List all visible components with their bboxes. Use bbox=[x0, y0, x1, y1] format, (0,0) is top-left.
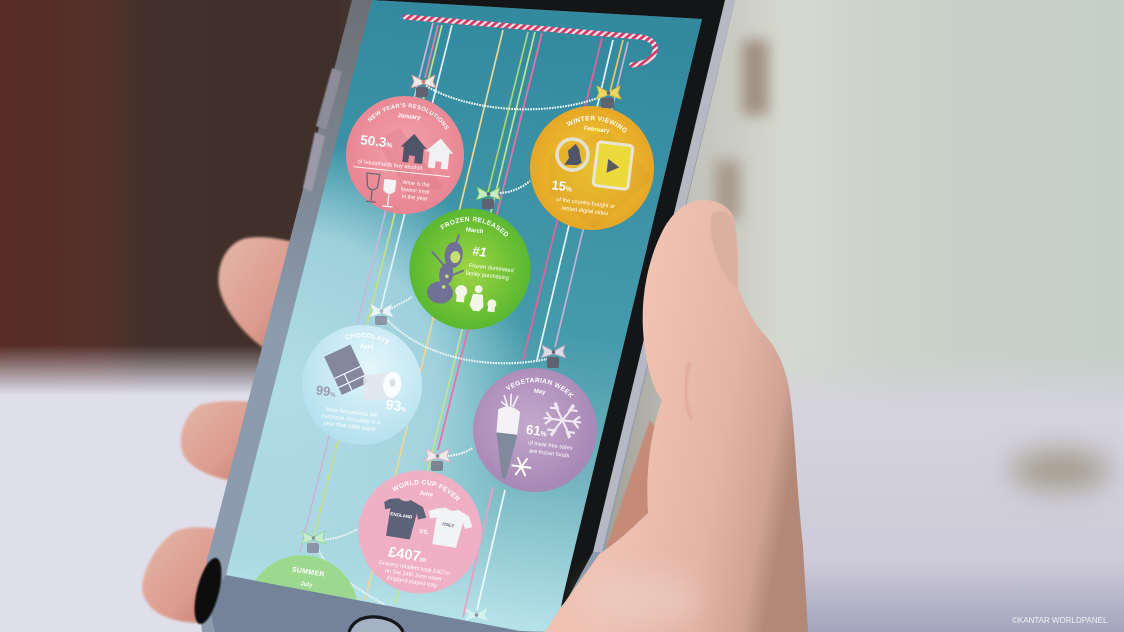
palm highlight bbox=[580, 570, 700, 626]
thumb shape bbox=[545, 200, 808, 632]
carrot icon bbox=[496, 394, 520, 479]
screen background bbox=[200, 0, 720, 632]
phone screen bbox=[226, 0, 702, 632]
bauble: Winter Viewing bbox=[530, 106, 654, 230]
bow: Winter Viewing bbox=[596, 86, 621, 108]
bauble: Winter Viewing: 15% bbox=[551, 177, 574, 195]
home button bbox=[349, 617, 403, 632]
bauble: Frozen Released: #1 bbox=[471, 243, 488, 260]
bauble: Winter Viewing: rented digital video bbox=[561, 206, 608, 217]
bauble: Chocolate: CHOCOLATE bbox=[345, 332, 390, 345]
bow: next bauble bbox=[465, 608, 488, 621]
dark wine glass bbox=[364, 173, 380, 202]
bauble: Frozen Released: family purchasing bbox=[465, 271, 509, 282]
finger one bbox=[218, 237, 300, 350]
white wine glass bbox=[382, 179, 396, 207]
silver right edge bbox=[592, 0, 735, 552]
bauble: Vegetarian Week: VEGETARIAN WEEK bbox=[505, 378, 574, 398]
bauble: World Cup Fever: Grocery retailers took £407m bbox=[378, 560, 451, 577]
copyright: ©KANTAR WORLDPANEL bbox=[1012, 616, 1108, 625]
bauble: Summer, July bbox=[255, 555, 357, 600]
bow: Chocolate bbox=[370, 304, 393, 325]
bauble: World Cup Fever: VS. bbox=[419, 529, 430, 536]
finger two bbox=[181, 401, 262, 481]
chocolate bar icon bbox=[324, 345, 368, 395]
phone body bbox=[200, 0, 735, 632]
bead garlands bbox=[318, 86, 606, 618]
bauble: Frozen Released: Frozen dominated bbox=[468, 263, 514, 274]
bauble: New Year's Resolutions: in the year bbox=[401, 194, 428, 203]
Italy shirt icon: ITALY bbox=[442, 521, 455, 528]
bauble: Frozen Released: FROZEN RELEASED bbox=[440, 216, 508, 236]
UK data ring bbox=[555, 137, 590, 172]
bow: Vegetarian bbox=[541, 345, 566, 368]
bauble: New Year's Resolutions: January bbox=[397, 113, 421, 121]
toilet roll icon bbox=[363, 372, 402, 400]
bauble: New Year's Resolutions: lowest treat bbox=[401, 187, 430, 196]
small white snowflake bbox=[510, 456, 532, 477]
bauble: Vegetarian Week: are frozen foods bbox=[529, 448, 570, 459]
bauble: Winter Viewing: February bbox=[584, 126, 610, 135]
bauble: World Cup Fever: on Sat 14th June when bbox=[384, 568, 442, 583]
bauble: Vegetarian Week: 61% bbox=[525, 422, 549, 440]
corner shadow bbox=[189, 555, 227, 627]
bauble: New Year's Resolutions: of households buy alcohol bbox=[357, 159, 422, 172]
candy cane bbox=[405, 17, 655, 65]
bauble: Vegetarian Week: May bbox=[533, 389, 546, 396]
black bezel bbox=[372, 0, 725, 612]
bauble: Chocolate: year than toilet paper bbox=[323, 421, 376, 433]
thumbnail bbox=[710, 211, 738, 288]
white house icon bbox=[426, 138, 454, 170]
chin bbox=[208, 575, 530, 632]
bauble: Frozen Released bbox=[410, 208, 530, 330]
bauble: World Cup Fever bbox=[358, 470, 482, 594]
bauble: Chocolate: purchase chocolate in a bbox=[321, 413, 381, 427]
strings bbox=[300, 23, 628, 617]
bow: New Year's bbox=[411, 75, 436, 97]
large outline snowflake bbox=[543, 402, 582, 439]
family icons bbox=[455, 285, 496, 312]
bauble: Vegetarian Week bbox=[473, 368, 597, 492]
knuckle crease bbox=[686, 362, 692, 420]
side buttons bbox=[303, 68, 342, 192]
bow: Summer bbox=[301, 531, 326, 553]
bauble: New Year's Resolutions bbox=[346, 96, 464, 214]
bauble: Chocolate: 99% bbox=[315, 382, 337, 400]
phone bbox=[189, 0, 735, 632]
bauble: Chocolate: 93% bbox=[385, 396, 408, 415]
bauble: Winter Viewing: WINTER VIEWING bbox=[566, 116, 627, 132]
snowman silhouette bbox=[427, 234, 464, 304]
bauble: Winter Viewing: of the country bought or bbox=[556, 197, 615, 210]
bauble: Frozen Released: March bbox=[465, 227, 484, 235]
England shirt icon: ENGLAND bbox=[390, 511, 413, 520]
England shirt icon bbox=[384, 498, 426, 540]
dark house icon bbox=[401, 134, 427, 164]
bow: Frozen bbox=[476, 187, 501, 209]
bauble: Summer, July: SUMMER bbox=[291, 566, 325, 579]
bauble: New Year's Resolutions: Wine is the bbox=[402, 180, 430, 189]
bauble: World Cup Fever: June bbox=[419, 490, 434, 499]
bauble: New Year's Resolutions: 50.3% bbox=[360, 132, 394, 151]
bauble: World Cup Fever: England played Italy bbox=[387, 575, 438, 589]
finger three bbox=[142, 527, 225, 625]
skin behind the phone on the right bbox=[606, 420, 664, 548]
bauble: Vegetarian Week: of meat free sales bbox=[528, 440, 573, 452]
bow: World Cup bbox=[425, 449, 450, 471]
hand: fingers behind the phone bbox=[142, 237, 664, 625]
bauble: Chocolate: April bbox=[359, 343, 374, 351]
bauble: Chocolate bbox=[302, 325, 422, 445]
tablet with play icon bbox=[593, 142, 633, 190]
bows and caps bbox=[301, 75, 621, 621]
bauble: Summer, July: July bbox=[300, 581, 313, 589]
bauble: World Cup Fever: WORLD CUP FEVER bbox=[392, 480, 460, 502]
curved heading: NEW YEAR'S RESOLUTIONS bbox=[368, 103, 449, 130]
bauble: World Cup Fever: £407m bbox=[387, 544, 428, 566]
bauble: Chocolate: More households will bbox=[325, 407, 378, 419]
thumb and palm bbox=[545, 200, 808, 632]
Italy shirt icon bbox=[428, 508, 472, 548]
